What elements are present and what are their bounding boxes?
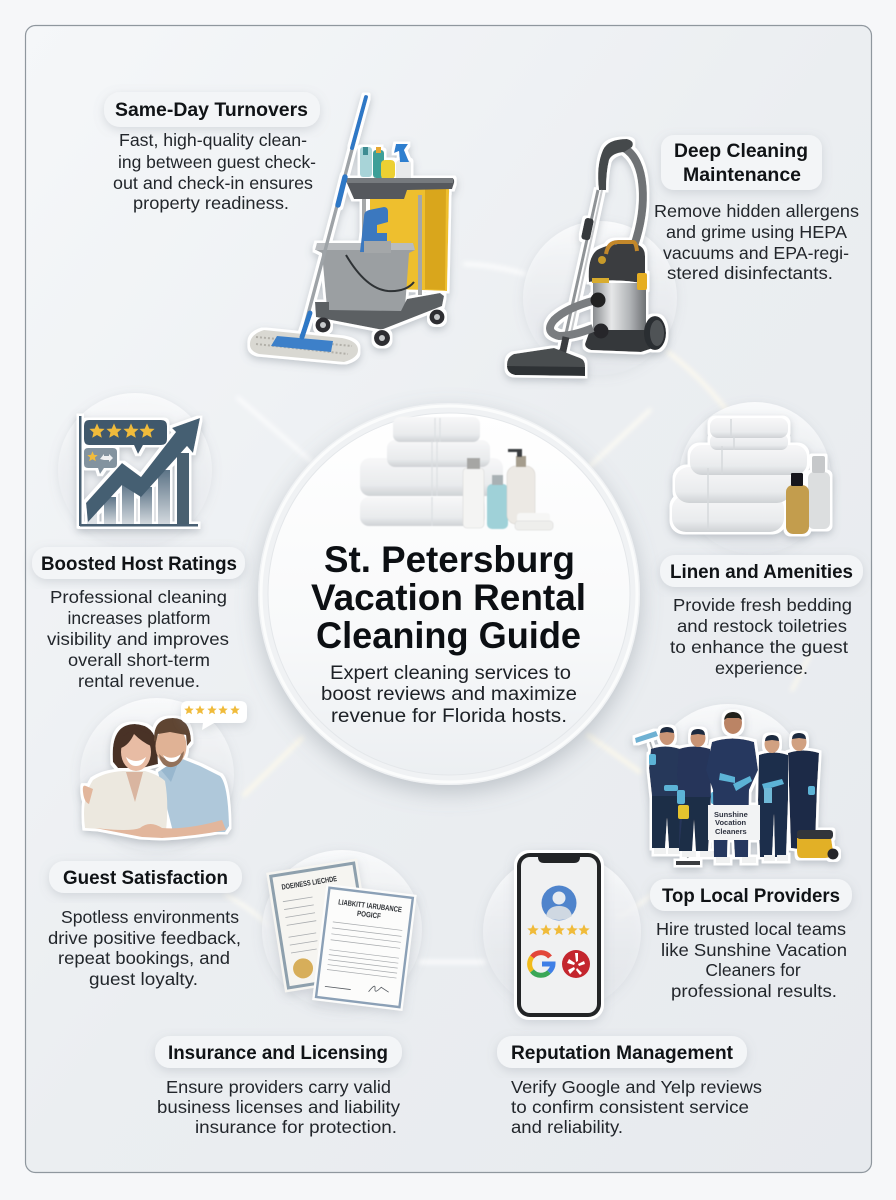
- text: reputation management: and reliability.: [511, 1117, 623, 1137]
- icon: happy couple: [83, 701, 247, 838]
- heading: linen and amenities: Linen and Amenities: [670, 561, 853, 583]
- text: reputation management: [511, 1077, 762, 1137]
- text: top local providers: [656, 919, 847, 1001]
- panel: boosted host ratings: [32, 416, 245, 691]
- text: linen and amenities: to enhance the guest: [670, 637, 848, 657]
- heading: linen and amenities: [660, 555, 863, 587]
- text: linen and amenities: and restock toiletries: [677, 616, 847, 636]
- heading: reputation management: [497, 1036, 747, 1068]
- icon: liability insurance document: LIABKITT IARUBANCE: [338, 897, 402, 914]
- icon: cleaning team: Vocation: [715, 818, 747, 827]
- backing discs: [58, 221, 831, 1011]
- text: insurance and licensing: business licenses and liability: [157, 1097, 400, 1117]
- text: linen and amenities: Provide fresh bedding: [673, 595, 852, 615]
- icon: liability insurance document: POGICF: [357, 909, 382, 921]
- text: boosted host ratings: rental revenue.: [78, 671, 200, 691]
- panel: guest satisfaction: [48, 701, 247, 989]
- heading: reputation management: Reputation Management: [511, 1042, 733, 1064]
- panel: top local providers: [635, 712, 852, 1001]
- text: guest satisfaction: repeat bookings, and: [58, 948, 230, 968]
- icon: rating bubble: [181, 701, 247, 730]
- text: same-day turnovers: Fast, high-quality clean-: [119, 130, 307, 150]
- text: deep cleaning maintenance: vacuums and EPA-regi-: [663, 243, 849, 263]
- icon: rating growth chart: [79, 416, 200, 526]
- panel: reputation management: [497, 850, 762, 1137]
- text: same-day turnovers: property readiness.: [133, 193, 289, 213]
- text: deep cleaning maintenance: and grime using HEPA: [666, 222, 847, 242]
- text: guest satisfaction: Spotless environments: [61, 907, 239, 927]
- icon: business license document: [266, 859, 376, 992]
- icon: canister vacuum: [507, 139, 666, 376]
- icon: cleaning team: Cleaners: [715, 827, 747, 836]
- icon: user avatar: [542, 886, 576, 920]
- icon: business license document: DOEINESS LIECHDE: [281, 874, 338, 892]
- icon: license and insurance documents: [266, 859, 417, 1011]
- icon: five stars: [527, 924, 590, 935]
- heading: boosted host ratings: [32, 547, 245, 579]
- subtitle: boost reviews and maximize: [321, 684, 577, 705]
- text: reputation management: to confirm consistent service: [511, 1097, 749, 1117]
- text: same-day turnovers: [113, 130, 316, 213]
- text: insurance and licensing: insurance for protection.: [195, 1117, 397, 1137]
- heading: insurance and licensing: [155, 1036, 402, 1068]
- title: Vacation Rental: [311, 577, 586, 618]
- title: St. Petersburg: [324, 539, 575, 580]
- glowing connector lines: [226, 264, 810, 962]
- icon: yelp logo: [562, 950, 590, 978]
- text: deep cleaning maintenance: Remove hidden allergens: [654, 201, 859, 221]
- heading: same-day turnovers: [104, 92, 320, 127]
- text: top local providers: Cleaners for: [705, 960, 801, 980]
- text: top local providers: professional results.: [671, 981, 837, 1001]
- icon: mop and cleaning cart: [250, 97, 454, 362]
- text: reputation management: Verify Google and Yelp reviews: [511, 1077, 762, 1097]
- heading: top local providers: [650, 879, 852, 911]
- text: linen and amenities: [670, 595, 852, 678]
- text: guest satisfaction: guest loyalty.: [89, 969, 198, 989]
- subtitle: Expert cleaning services to: [330, 663, 571, 684]
- panel: insurance and licensing: [155, 859, 417, 1137]
- heading: deep cleaning maintenance: Maintenance: [683, 164, 801, 186]
- text: insurance and licensing: Ensure providers carry valid: [166, 1077, 391, 1097]
- icon: phone with reviews: [514, 850, 604, 1020]
- icon: liability insurance document: [312, 884, 417, 1011]
- icon: folded towels and bottles: [672, 418, 830, 534]
- panel: central hub: [258, 403, 640, 785]
- heading: insurance and licensing: Insurance and Licensing: [168, 1042, 388, 1064]
- text: boosted host ratings: Professional cleaning: [50, 587, 227, 607]
- heading: top local providers: Top Local Providers: [662, 885, 840, 907]
- text: guest satisfaction: drive positive feedback,: [48, 928, 241, 948]
- heading: boosted host ratings: Boosted Host Ratings: [41, 553, 237, 575]
- subtitle: revenue for Florida hosts.: [331, 706, 567, 727]
- text: deep cleaning maintenance: stered disinfectants.: [667, 263, 833, 283]
- text: boosted host ratings: increases platform: [68, 608, 210, 628]
- heading: deep cleaning maintenance: [661, 135, 822, 190]
- icon: cleaning team: Sunshine: [714, 810, 748, 819]
- icon: google logo: [530, 953, 553, 975]
- panel: deep cleaning maintenance: [507, 135, 859, 376]
- heading: guest satisfaction: [49, 861, 242, 893]
- text: deep cleaning maintenance: [654, 201, 859, 283]
- text: insurance and licensing: [157, 1077, 400, 1137]
- title: [311, 539, 586, 656]
- title: Cleaning Guide: [316, 615, 581, 656]
- heading: deep cleaning maintenance: Deep Cleaning: [674, 140, 808, 162]
- text: top local providers: Hire trusted local teams: [656, 919, 846, 939]
- icon: central towels and toiletries: [360, 417, 553, 530]
- text: guest satisfaction: [48, 907, 241, 989]
- panel: linen and amenities: [660, 418, 863, 678]
- text: boosted host ratings: [47, 587, 229, 691]
- text: boosted host ratings: overall short-term: [68, 650, 210, 670]
- heading: guest satisfaction: Guest Satisfaction: [63, 867, 228, 889]
- icon: cleaning team: [635, 712, 838, 865]
- subtitle: [321, 663, 577, 727]
- text: linen and amenities: experience.: [715, 658, 808, 678]
- panel: same-day turnovers: [104, 92, 454, 362]
- text: top local providers: like Sunshine Vacation: [661, 940, 847, 960]
- heading: same-day turnovers: Same-Day Turnovers: [115, 99, 308, 121]
- text: same-day turnovers: out and check-in ensures: [113, 173, 313, 193]
- text: same-day turnovers: ing between guest check-: [118, 152, 316, 172]
- text: boosted host ratings: visibility and improves: [47, 629, 229, 649]
